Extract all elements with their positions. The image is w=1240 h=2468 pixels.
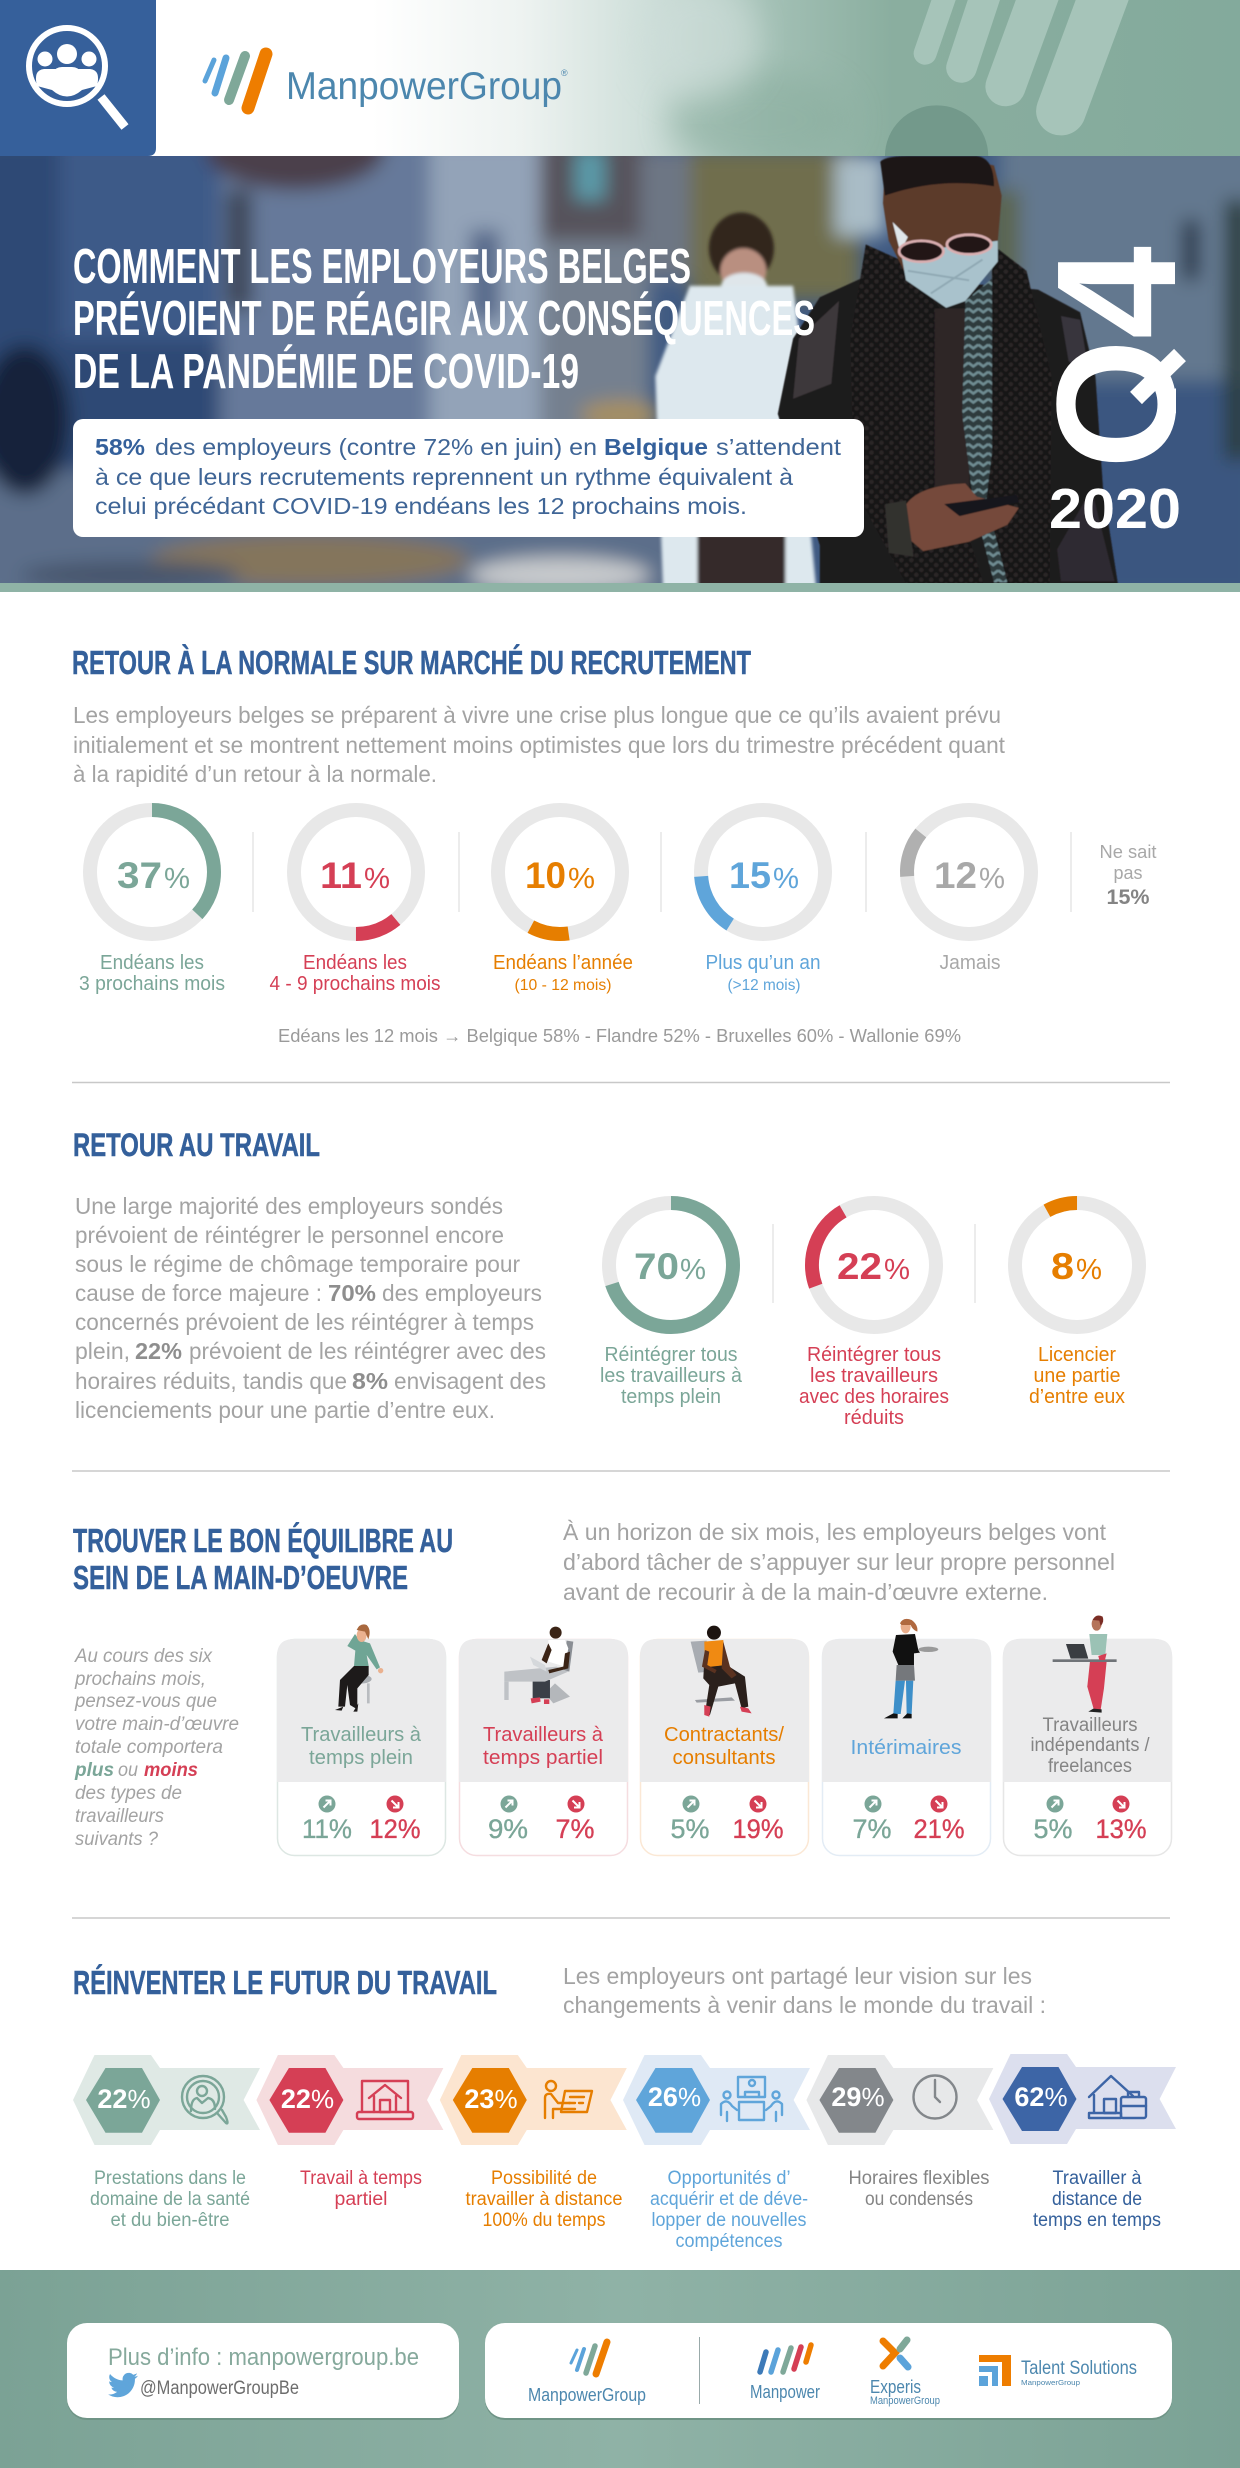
icon: man at desk xyxy=(504,1627,573,1704)
text block: six months: avant de recourir à de la main-d’œuvre externe. xyxy=(563,1579,1048,1605)
green band under hero xyxy=(0,583,1240,592)
text block: retour au travail: 70% xyxy=(328,1280,376,1306)
callout: 58% employers: Belgique xyxy=(604,434,708,460)
donut: 37%: % xyxy=(164,863,190,895)
question text xyxy=(74,1646,239,1850)
step: 62% distance: distance de xyxy=(1052,2189,1142,2210)
icon: up arrow xyxy=(1046,1796,1064,1812)
card: travailleurs à temps partiel: 9% xyxy=(488,1814,528,1844)
card: travailleurs à temps plein: 12% xyxy=(370,1814,420,1844)
card: contractants/consultants: 5% xyxy=(670,1814,710,1844)
donut: 37% xyxy=(79,810,225,995)
donut: 22% xyxy=(795,1186,953,1429)
logo: ManpowerGroup header xyxy=(205,54,568,108)
text block: vision: Les employeurs ont partagé leur vision sur les xyxy=(563,1963,1032,1989)
step: 62% distance xyxy=(989,2054,1176,2231)
card: contractants/consultants: Contractants/ xyxy=(664,1724,784,1746)
donut: 22%: les travailleurs xyxy=(810,1365,938,1387)
stat: ne sait pas: Ne sait xyxy=(1100,842,1156,862)
panel: contact: @ManpowerGroupBe xyxy=(140,2378,299,2399)
text: regional breakdown: Edéans les 12 mois → Belgique 58% - Flandre 52% - Bruxelles 60% - Wallonie 69% xyxy=(278,1026,961,1046)
donut: 10%: Endéans l’année xyxy=(493,952,633,974)
donut: 37%: Endéans les xyxy=(100,952,204,974)
donut: 10%: 10 xyxy=(525,855,566,896)
hero photo xyxy=(0,156,1240,583)
panel: contact: Plus d’info : manpowergroup.be xyxy=(108,2344,419,2371)
callout: 58% employers: des employeurs (contre 72% en juin) en xyxy=(155,434,597,460)
icon: down arrow xyxy=(386,1796,404,1812)
card: indépendants / freelances: 5% xyxy=(1034,1814,1072,1844)
text block: six months xyxy=(563,1519,1115,1605)
icon: twitter bird xyxy=(108,2373,138,2397)
donut: 11%: 11 xyxy=(320,855,362,896)
question text: des types de xyxy=(75,1783,182,1804)
text block: crisis intro: à la rapidité d’un retour à la normale. xyxy=(73,761,437,787)
footer band xyxy=(0,2270,1240,2468)
step: 26% compétences: lopper de nouvelles xyxy=(652,2210,806,2231)
title: COMMENT LES EMPLOYEURS BELGES xyxy=(73,240,691,294)
donut: 37%: 3 prochains mois xyxy=(79,973,225,995)
icon: man in office chair xyxy=(691,1626,752,1717)
step: 22% temps partiel xyxy=(256,2055,443,2210)
step: 23% distance: travailler à distance xyxy=(466,2189,622,2210)
text block: crisis intro xyxy=(73,702,1006,787)
donut: 12%: 12 xyxy=(934,855,977,896)
icon: person in magnifier xyxy=(182,2076,228,2123)
donut: 22%: avec des horaires xyxy=(799,1386,949,1408)
donut: 70%: 70 xyxy=(634,1246,679,1287)
callout: 58% employers xyxy=(73,419,864,537)
text block: vision xyxy=(563,1963,1046,2018)
card: travailleurs à temps plein: temps plein xyxy=(309,1747,413,1769)
stat: ne sait pas xyxy=(1100,842,1156,909)
question text: travailleurs xyxy=(75,1806,164,1827)
text block: retour au travail: 22% xyxy=(135,1338,182,1364)
question text: plus xyxy=(74,1760,114,1781)
icon: standing woman with tray xyxy=(884,1619,938,1718)
step: 26% compétences xyxy=(623,2055,810,2252)
card: intérimaires xyxy=(822,1619,991,1856)
donut: 15% xyxy=(678,787,848,994)
text block: retour au travail: prévoient de les réintégrer avec des xyxy=(189,1338,546,1364)
donut: 8%: 8 xyxy=(1051,1246,1074,1287)
question text: prochains mois, xyxy=(74,1669,206,1690)
logo: Manpower: Manpower xyxy=(750,2382,820,2402)
donut: 11% xyxy=(269,785,443,995)
step: 22% temps partiel: partiel xyxy=(334,2189,388,2210)
icon: person at laptop xyxy=(545,2081,592,2118)
step: 23% distance xyxy=(440,2055,627,2231)
card: contractants/consultants: consultants xyxy=(672,1747,776,1769)
icon: woman sitting xyxy=(335,1624,383,1712)
text block: crisis intro: initialement et se montrent nettement moins optimistes que lors du trimestre précédent quant xyxy=(73,732,1006,758)
text block: retour au travail: licenciements pour une partie d’entre eux. xyxy=(75,1397,495,1423)
callout: 58% employers: s’attendent xyxy=(716,434,842,460)
donut: 11%: Endéans les xyxy=(303,952,407,974)
donut: 12%: % xyxy=(979,863,1005,895)
card: contractants/consultants xyxy=(640,1626,809,1856)
donut: 11%: 4 - 9 prochains mois xyxy=(270,973,440,995)
donut: 8%: % xyxy=(1076,1254,1102,1286)
card: indépendants / freelances: freelances xyxy=(1048,1756,1132,1777)
donut: 12% xyxy=(903,806,1035,974)
step: 22% santé xyxy=(73,2055,260,2231)
text block: retour au travail: sous le régime de chômage temporaire pour xyxy=(75,1251,520,1277)
step: 22% santé: et du bien-être xyxy=(110,2210,230,2231)
step: 22% temps partiel: 22% xyxy=(281,2084,334,2114)
icon: standing freelancer at laptop xyxy=(1053,1616,1117,1713)
step: 22% santé: domaine de la santé xyxy=(90,2189,250,2210)
logo: Experis: ManpowerGroup xyxy=(870,2395,940,2407)
card: intérimaires: 7% xyxy=(852,1814,892,1844)
donut: 70%: les travailleurs à xyxy=(600,1365,743,1387)
donut: 15%: 15 xyxy=(729,855,771,896)
donut: 70%: temps plein xyxy=(621,1386,721,1408)
card: indépendants / freelances: indépendants / xyxy=(1030,1735,1150,1756)
step: 26% compétences: 26% xyxy=(648,2082,701,2112)
card: travailleurs à temps plein: Travailleurs à xyxy=(301,1724,422,1746)
donut: 11%: % xyxy=(364,863,390,895)
step: 62% distance: Travailler à xyxy=(1052,2168,1142,2189)
question text: totale comportera xyxy=(75,1737,223,1758)
man with mask and phone xyxy=(778,156,1118,587)
icon: up arrow xyxy=(500,1796,518,1812)
stat: ne sait pas: 15% xyxy=(1106,886,1150,909)
question text: Au cours des six xyxy=(74,1646,213,1667)
step: 26% compétences: compétences xyxy=(676,2231,782,2252)
title: DE LA PANDÉMIE DE COVID-19 xyxy=(73,345,579,399)
card: intérimaires: Intérimaires xyxy=(850,1737,962,1759)
donut: 70%: Réintégrer tous xyxy=(604,1344,738,1366)
donut: 70% xyxy=(600,1203,743,1408)
icon: up arrow xyxy=(318,1796,336,1812)
question text: suivants ? xyxy=(75,1829,158,1850)
card: indépendants / freelances xyxy=(1003,1616,1172,1856)
step: 29% horaires: 29% xyxy=(831,2082,885,2112)
donut: 70%: % xyxy=(680,1254,706,1286)
step: 62% distance: 62% xyxy=(1014,2082,1068,2112)
text block: retour au travail: envisagent des xyxy=(394,1368,546,1394)
step: 29% horaires: Horaires flexibles xyxy=(848,2168,990,2189)
text block: vision: changements à venir dans le monde du travail : xyxy=(563,1992,1046,2018)
logo: ManpowerGroup header: ManpowerGroup xyxy=(286,65,562,108)
donut: 8%: une partie xyxy=(1034,1365,1120,1387)
donut: 10%: (10 - 12 mois) xyxy=(514,977,612,994)
donut: 10%: % xyxy=(568,863,595,895)
heading: trouver le bon équilibre: SEIN DE LA MAIN-D’OEUVRE xyxy=(73,1559,408,1596)
text block: retour au travail: Une large majorité des employeurs sondés xyxy=(75,1193,503,1219)
callout: 58% employers: celui précédant COVID-19 endéans les 12 prochains mois. xyxy=(95,493,747,519)
card: travailleurs à temps partiel: 7% xyxy=(556,1814,594,1844)
question text: pensez-vous que xyxy=(74,1691,217,1712)
logo: ManpowerGroup xyxy=(528,2342,646,2405)
heading: trouver le bon équilibre: TROUVER LE BON ÉQUILIBRE AU xyxy=(73,1522,453,1559)
donut: 15%: Plus qu’un an xyxy=(706,952,820,974)
text block: six months: d’abord tâcher de s’appuyer sur leur propre personnel xyxy=(563,1549,1115,1575)
text block: six months: À un horizon de six mois, les employeurs belges vont xyxy=(563,1519,1107,1545)
donut: 8%: d’entre eux xyxy=(1029,1386,1125,1408)
logo: Experis xyxy=(870,2340,940,2407)
blurred woman in background xyxy=(655,213,816,594)
heading: retour à la normale: RETOUR À LA NORMALE SUR MARCHÉ DU RECRUTEMENT xyxy=(72,644,751,681)
step: 62% distance: temps en temps xyxy=(1033,2210,1161,2231)
question text: votre main-d’œuvre xyxy=(75,1714,239,1735)
donut: 8%: Licencier xyxy=(1038,1344,1116,1366)
card: travailleurs à temps partiel xyxy=(459,1627,628,1856)
step: 22% santé: 22% xyxy=(97,2084,151,2114)
title xyxy=(73,240,815,399)
icon: up arrow xyxy=(864,1796,882,1812)
text block: retour au travail: cause de force majeure : xyxy=(75,1280,322,1306)
icon: house and briefcase xyxy=(1089,2076,1146,2118)
icon: video meeting xyxy=(721,2077,782,2121)
text block: retour au travail: des employeurs xyxy=(382,1280,542,1306)
step: 26% compétences: acquérir et de déve- xyxy=(650,2189,808,2210)
step: 29% horaires xyxy=(806,2055,993,2210)
logo: Experis: Experis xyxy=(870,2377,921,2397)
icon: down arrow xyxy=(1112,1796,1130,1812)
logo: ManpowerGroup header: ® xyxy=(561,68,568,78)
step: 23% distance: 100% du temps xyxy=(482,2210,606,2231)
card: indépendants / freelances: 13% xyxy=(1096,1814,1146,1844)
callout: 58% employers: 58% xyxy=(95,434,145,460)
step: 26% compétences: Opportunités d’ xyxy=(668,2168,790,2189)
panel: brand logos xyxy=(485,2323,1172,2420)
card: travailleurs à temps plein: 11% xyxy=(302,1814,352,1844)
step: 23% distance: 23% xyxy=(464,2084,518,2114)
step: 22% santé: Prestations dans le xyxy=(94,2168,246,2189)
Q4 2020 badge: 2020 xyxy=(1049,477,1181,541)
logo: Talent Solutions: Talent Solutions xyxy=(1021,2358,1137,2379)
text block: retour au travail xyxy=(75,1193,546,1423)
Q4 2020 badge: Q4 xyxy=(1022,246,1212,469)
logo: ManpowerGroup: ManpowerGroup xyxy=(528,2385,646,2405)
question text: ou xyxy=(118,1760,138,1781)
callout: 58% employers: à ce que leurs recrutements reprennent un rythme équivalent à xyxy=(95,464,793,490)
donut: 15%: (>12 mois) xyxy=(728,977,800,994)
icon: house in laptop xyxy=(357,2081,413,2119)
donut: 22%: Réintégrer tous xyxy=(807,1344,941,1366)
text block: retour au travail: prévoient de réintégrer le personnel encore xyxy=(75,1222,504,1248)
text block: retour au travail: 8% xyxy=(352,1368,388,1394)
card: travailleurs à temps partiel: temps partiel xyxy=(483,1747,603,1769)
donut: 12%: Jamais xyxy=(940,952,1000,974)
text block: retour au travail: concernés prévoient de les réintégrer à temps xyxy=(75,1309,534,1335)
text block: retour au travail: horaires réduits, tandis que xyxy=(75,1368,347,1394)
card: intérimaires: 21% xyxy=(914,1814,964,1844)
logo: Talent Solutions xyxy=(979,2355,1137,2387)
icon: down arrow xyxy=(750,1796,766,1812)
card: contractants/consultants: 19% xyxy=(732,1814,784,1844)
card: travailleurs à temps partiel: Travailleurs à xyxy=(483,1724,604,1746)
header band xyxy=(443,0,1240,156)
donut: 22%: % xyxy=(884,1254,910,1286)
text block: crisis intro: Les employeurs belges se préparent à vivre une crise plus longue que ce qu’ils avaient prévu xyxy=(73,702,1001,728)
icon: down arrow xyxy=(930,1796,948,1812)
icon: clock xyxy=(914,2076,956,2118)
donut: 22%: réduits xyxy=(844,1407,904,1429)
step: 29% horaires: ou condensés xyxy=(865,2189,973,2210)
donut: 10% xyxy=(490,802,633,994)
stat: ne sait pas: pas xyxy=(1114,863,1142,883)
donut: 8% xyxy=(993,1181,1161,1408)
heading: trouver le bon équilibre xyxy=(73,1522,453,1596)
icon: magnifier tile xyxy=(0,0,156,156)
card: travailleurs à temps plein xyxy=(277,1624,446,1856)
logo: Manpower xyxy=(750,2345,820,2402)
donut: 37%: 37 xyxy=(117,855,162,896)
logo: Talent Solutions: ManpowerGroup xyxy=(1021,2380,1080,2387)
donut: 22%: 22 xyxy=(837,1246,882,1287)
icon: down arrow xyxy=(568,1796,584,1812)
heading: réinventer le futur: RÉINVENTER LE FUTUR DU TRAVAIL xyxy=(73,1964,497,2001)
question text: moins xyxy=(144,1760,198,1781)
step: 23% distance: Possibilité de xyxy=(491,2168,597,2189)
panel: contact xyxy=(67,2323,459,2420)
step: 22% temps partiel: Travail à temps xyxy=(300,2168,422,2189)
Q4 2020 badge xyxy=(1051,246,1186,528)
donut: 15%: % xyxy=(773,863,799,895)
icon: up arrow xyxy=(682,1796,700,1812)
text block: retour au travail: plein, xyxy=(75,1338,130,1364)
card: indépendants / freelances: Travailleurs xyxy=(1042,1715,1138,1736)
heading: retour au travail: RETOUR AU TRAVAIL xyxy=(73,1127,320,1163)
title: PRÉVOIENT DE RÉAGIR AUX CONSÉQUENCES xyxy=(73,292,815,346)
